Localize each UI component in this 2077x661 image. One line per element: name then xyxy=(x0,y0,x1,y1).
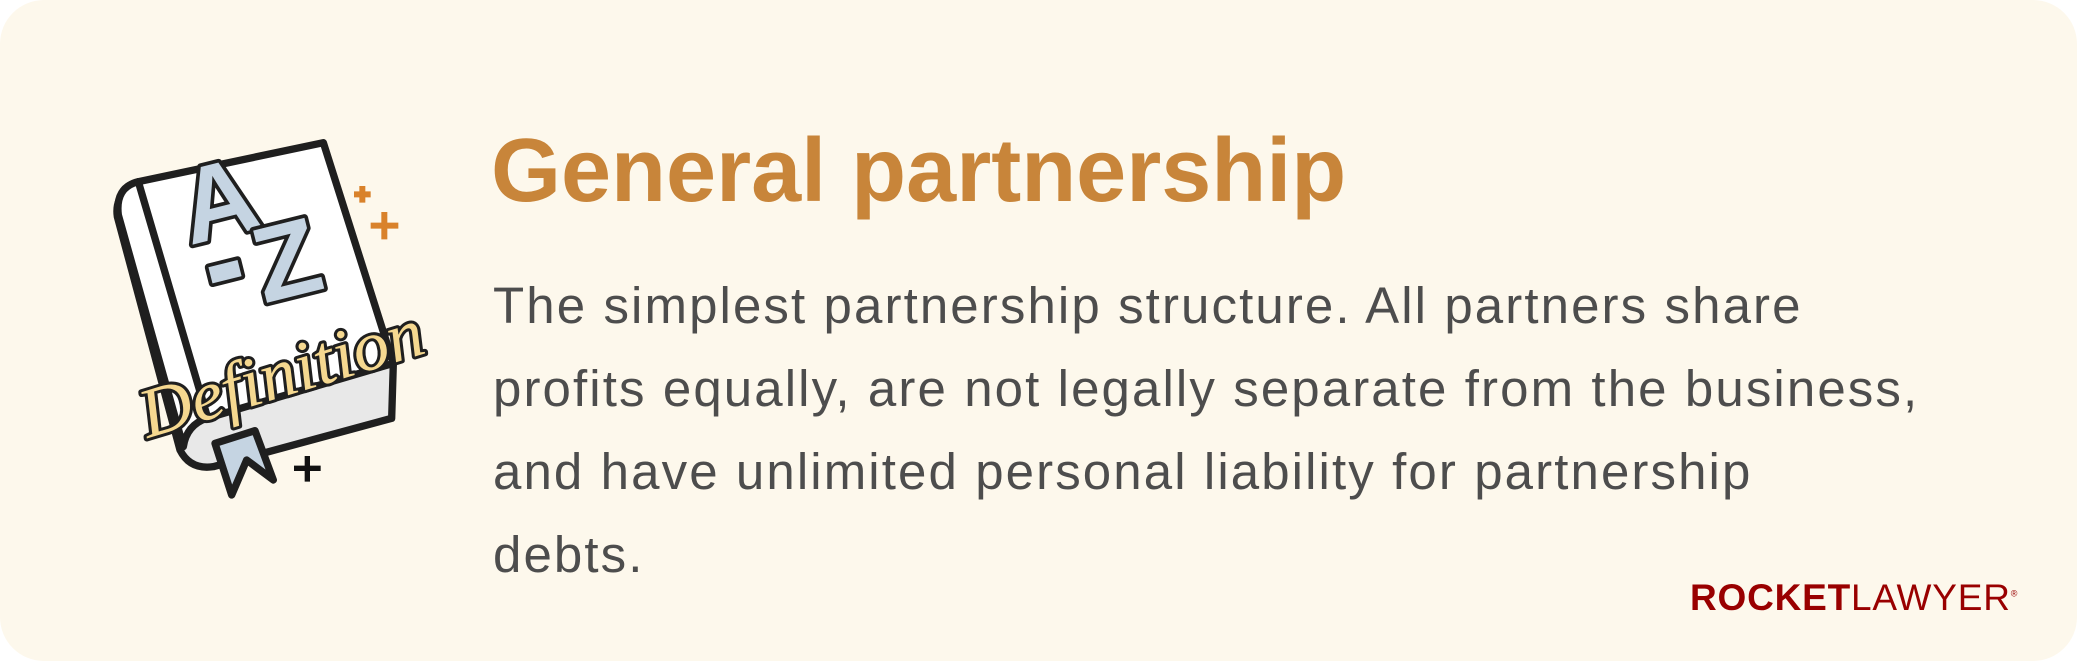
icon: definition book: A xyxy=(167,133,270,268)
icon: definition book: Definition xyxy=(129,294,433,454)
title: General partnership xyxy=(491,121,1346,221)
body text: profits equally, are not legally separate from the business, xyxy=(493,360,1919,417)
icon: definition book: Z xyxy=(241,194,333,326)
body text: and have unlimited personal liability for partnership xyxy=(493,443,1752,500)
icon: definition book xyxy=(113,133,433,499)
body text: The simplest partnership structure. All partners share xyxy=(493,277,1803,334)
body text xyxy=(493,277,1919,583)
body text: debts. xyxy=(493,526,645,583)
logo: Rocket Lawyer: ROCKETLAWYER® xyxy=(1690,577,2018,618)
